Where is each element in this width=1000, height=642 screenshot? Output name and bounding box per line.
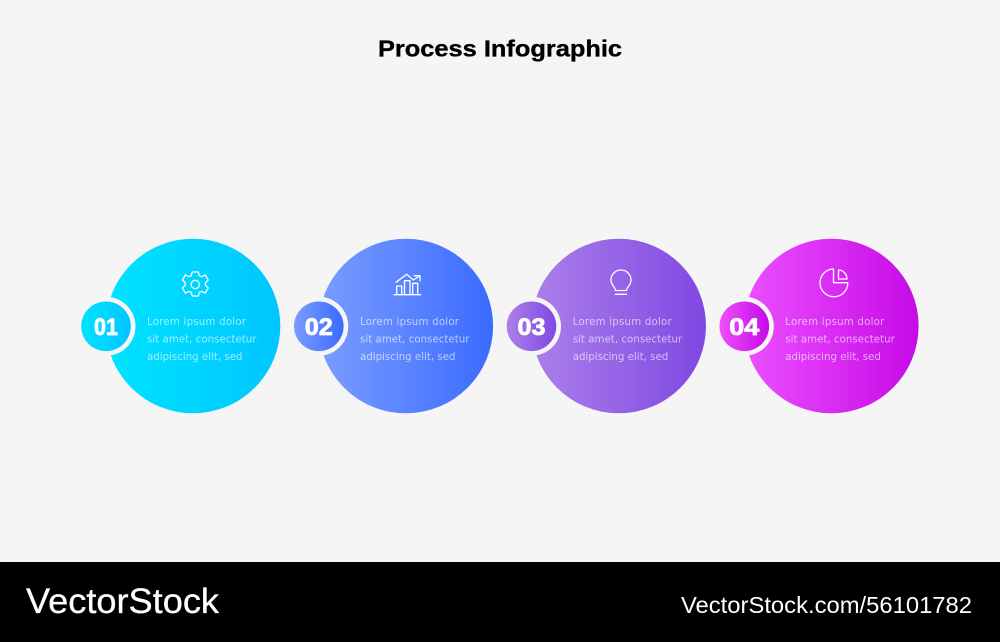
step 04 number badge: 04 — [729, 314, 760, 341]
watermark footer bar — [0, 562, 1000, 642]
step 03 large circle — [531, 239, 706, 413]
icon: light bulb — [611, 270, 631, 294]
icon: bar chart with arrow — [394, 274, 420, 295]
step 02 description: sit amet, consectetur — [360, 334, 470, 346]
step 03 description: sit amet, consectetur — [573, 334, 683, 346]
title: Process Infographic — [378, 36, 622, 62]
step 02 description: Lorem ipsum dolor — [360, 317, 460, 328]
step 02 number badge — [289, 297, 348, 356]
panel: step 04 — [715, 239, 919, 413]
step 02 description — [360, 317, 470, 363]
step 01 large circle — [106, 239, 280, 413]
step 01 description: adipiscing elit, sed — [147, 352, 242, 363]
step 01 description: sit amet, consectetur — [147, 334, 257, 346]
step 03 description: Lorem ipsum dolor — [573, 317, 672, 328]
step 04 large circle — [744, 239, 919, 413]
step 03 number badge: 03 — [518, 314, 546, 341]
VectorStock image URL text: VectorStock.com/56101782 — [681, 592, 972, 618]
step 03 description: adipiscing elit, sed — [573, 352, 668, 363]
step 03 number badge — [502, 297, 561, 356]
step 04 description: Lorem ipsum dolor — [785, 317, 885, 328]
icon: pie chart — [820, 269, 848, 297]
panel: step 03 — [502, 239, 706, 413]
step 02 large circle — [318, 239, 493, 413]
step 02 number badge: 02 — [305, 314, 333, 341]
VectorStock logo text: VectorStock — [26, 582, 220, 621]
step 04 number badge — [715, 297, 774, 356]
panel: step 01 — [76, 239, 280, 413]
step 04 description: adipiscing elit, sed — [785, 352, 881, 363]
step 01 number badge — [76, 297, 136, 356]
step 02 description: adipiscing elit, sed — [360, 352, 456, 363]
panel: step 02 — [289, 239, 493, 413]
step 04 description: sit amet, consectetur — [785, 334, 896, 346]
step 03 description — [573, 317, 683, 363]
icon: gear — [182, 272, 208, 296]
step 01 number badge: 01 — [94, 314, 118, 341]
step 04 description — [785, 317, 896, 363]
step 01 description — [147, 317, 257, 363]
step 01 description: Lorem ipsum dolor — [147, 317, 247, 328]
